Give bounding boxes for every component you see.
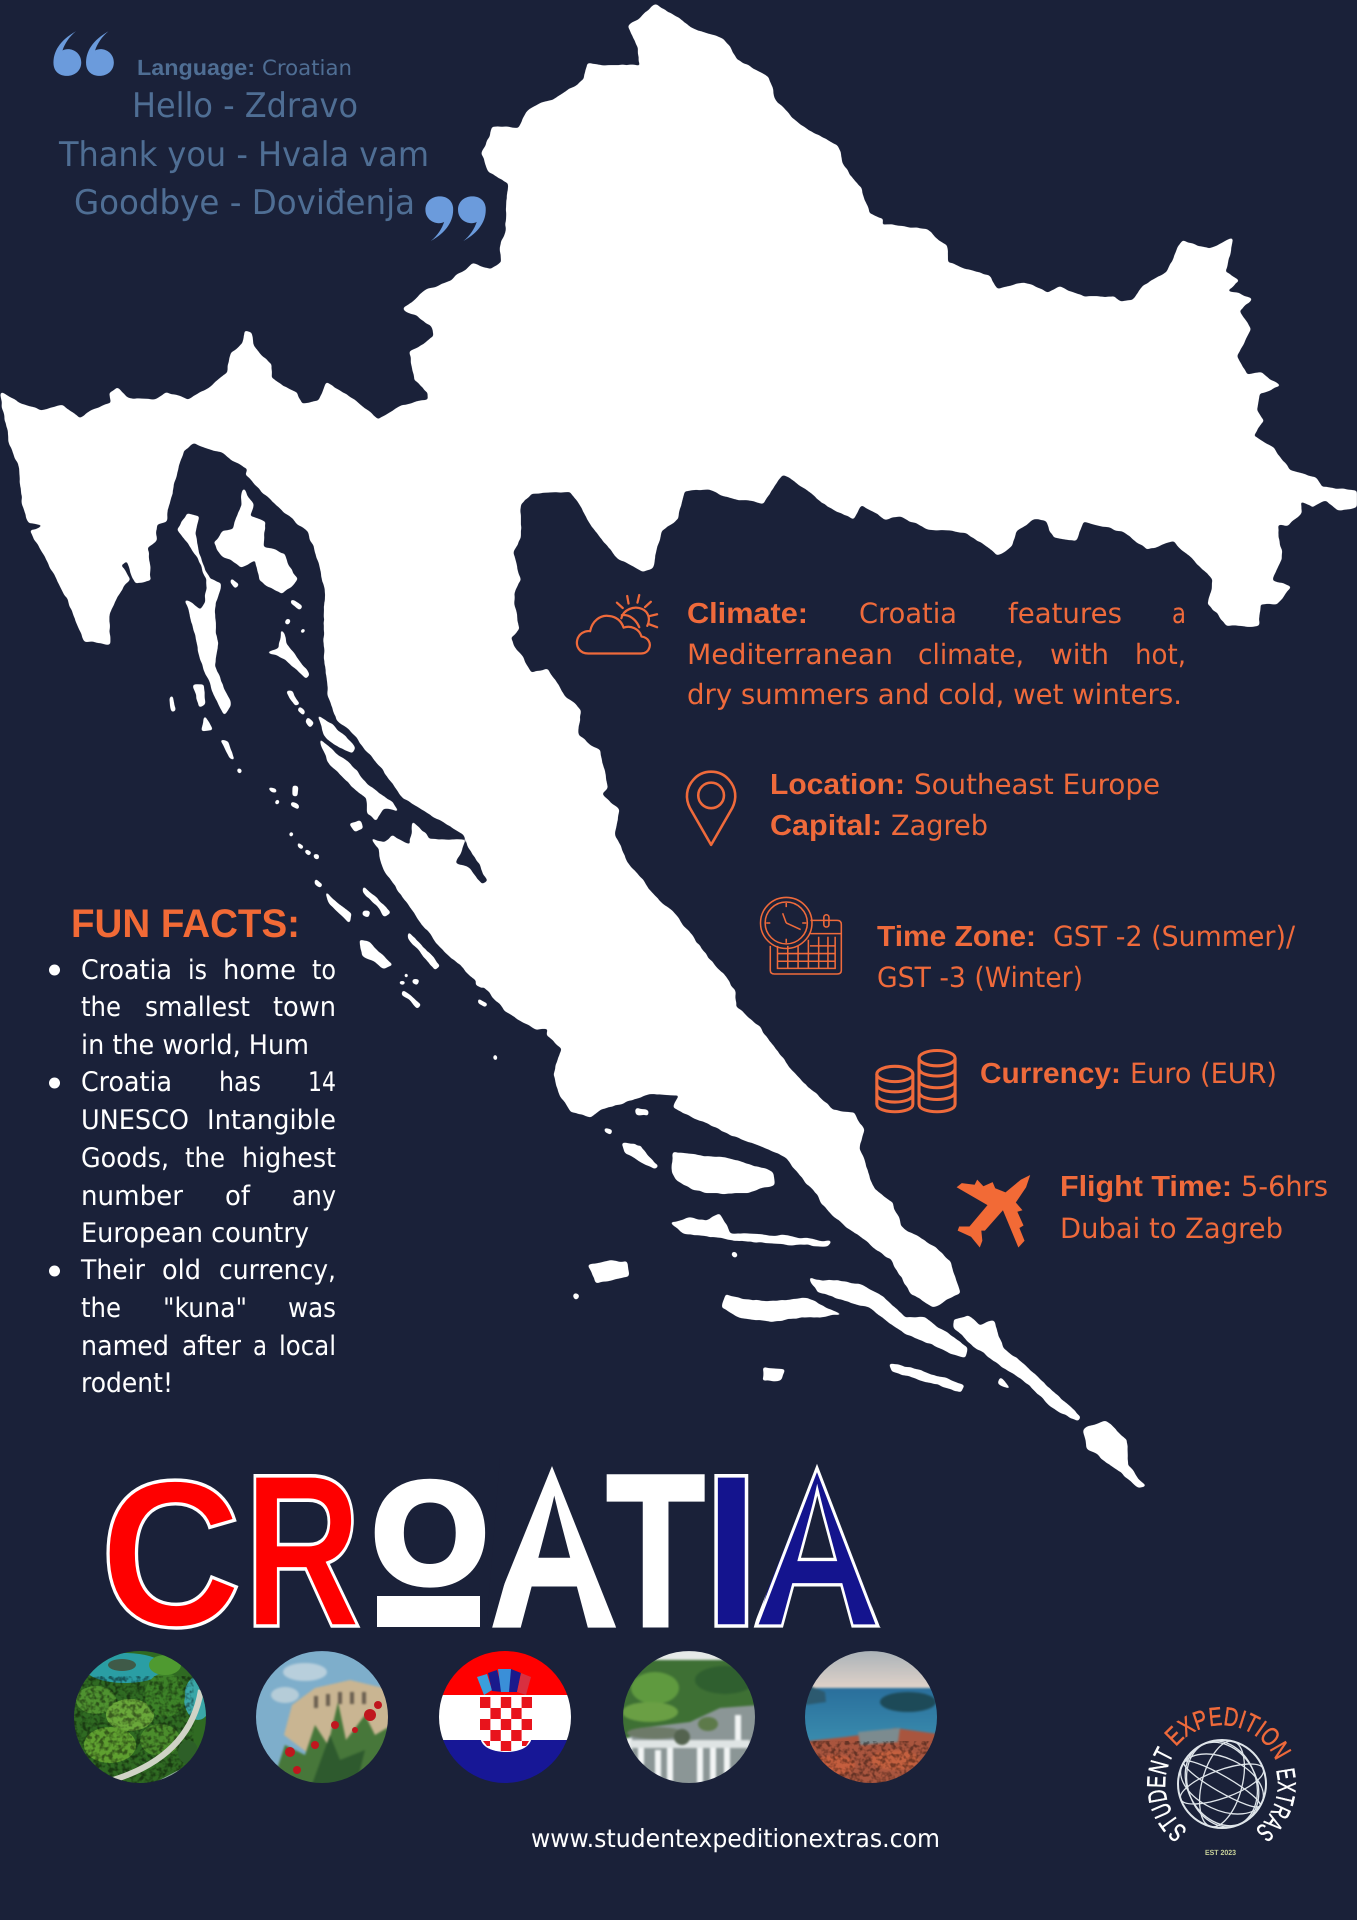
fun facts list: UNESCO — [81, 1105, 189, 1136]
fun facts list: old — [162, 1255, 201, 1286]
title: CROATIA: A — [490, 1414, 619, 1676]
fun facts list: smallest — [145, 992, 250, 1023]
currency text: Euro (EUR) — [1130, 1057, 1277, 1090]
icon: map pin — [687, 772, 735, 845]
fun facts list: a — [253, 1331, 267, 1362]
fun facts list: in the world, Hum — [81, 1030, 309, 1061]
flight text: Flight Time: — [1060, 1171, 1232, 1203]
fun facts heading: FUN FACTS: — [71, 902, 300, 946]
currency block — [877, 1051, 1277, 1112]
fun facts list: is — [188, 955, 207, 986]
climate text: Croatia — [859, 597, 957, 630]
climate text: dry summers and cold, wet winters. — [687, 678, 1182, 711]
fun facts list: home — [223, 955, 296, 986]
photo: Pula arena — [256, 1651, 388, 1783]
climate text: Mediterranean — [687, 638, 893, 671]
fun facts list: named — [81, 1331, 169, 1362]
fun facts list: rodent! — [81, 1368, 173, 1399]
icon: cloud and sun — [577, 595, 657, 654]
logo: globe — [1171, 1729, 1273, 1839]
fun facts list: local — [279, 1331, 336, 1362]
title: CROATIA: C — [100, 1437, 242, 1671]
photo: Plitvice lakes — [70, 1650, 212, 1785]
icon: closing quote — [425, 196, 486, 241]
fun facts list: 14 — [308, 1067, 336, 1098]
map: northern islands — [178, 489, 309, 714]
time zone text — [877, 920, 1296, 994]
logo: curved name: EXTRAS — [1256, 1768, 1296, 1842]
language text: Thank you - Hvala vam — [58, 135, 429, 175]
time zone text: GST -2 (Summer)/ — [1053, 920, 1296, 953]
website URL: www.studentexpeditionextras.com — [531, 1824, 940, 1853]
icon: airplane — [957, 1175, 1030, 1247]
climate text: with — [1050, 638, 1109, 671]
photo: Dubrovnik — [805, 1651, 937, 1783]
icon: coin stacks — [877, 1051, 955, 1112]
time zone text: GST -3 (Winter) — [877, 961, 1083, 994]
climate block — [577, 595, 1186, 711]
language text — [58, 55, 429, 223]
fun facts list: Croatia — [81, 1067, 172, 1098]
fun facts list: the — [81, 1293, 121, 1324]
location text: Capital: — [770, 810, 882, 842]
fun facts list: Croatia — [81, 955, 172, 986]
fun facts list: the — [81, 992, 121, 1023]
logo: curved name — [1146, 1706, 1296, 1842]
fun facts list: number — [81, 1181, 184, 1212]
location text: Southeast Europe — [914, 768, 1160, 801]
fun facts list: was — [288, 1293, 336, 1324]
currency text: Currency: — [980, 1058, 1121, 1090]
fun facts list: European country — [81, 1218, 309, 1249]
fun facts bullets — [49, 964, 60, 1276]
climate text — [687, 597, 1186, 711]
climate text: a — [1172, 597, 1186, 630]
time zone text: Time Zone: — [877, 921, 1036, 953]
logo: curved name: STUDENT — [1146, 1746, 1186, 1842]
fun facts list: the — [185, 1143, 225, 1174]
location text — [770, 768, 1160, 842]
logo: curved name: EXPEDITION — [1164, 1706, 1292, 1760]
fun facts list: to — [312, 955, 336, 986]
fun facts list: Intangible — [207, 1105, 336, 1136]
language text: Goodbye - Doviđenja — [74, 183, 415, 223]
language text: Language: — [137, 55, 255, 80]
map of Croatia — [1, 5, 1356, 1487]
location text: Location: — [770, 769, 905, 801]
logo: established date: EST 2023 — [1205, 1848, 1236, 1857]
flight text — [1060, 1170, 1328, 1245]
fun facts list: has — [219, 1067, 261, 1098]
flag: crown — [477, 1669, 531, 1695]
flag: shield — [480, 1697, 532, 1752]
title: CROATIA: A — [751, 1414, 884, 1676]
icon: opening quote — [53, 31, 114, 76]
fun facts list: town — [273, 992, 336, 1023]
icon: clock and calendar — [761, 897, 841, 974]
map: mainland — [1, 5, 1356, 1306]
title: CROATIA: O — [372, 1453, 488, 1613]
fun facts list: highest — [242, 1143, 336, 1174]
fun facts list: Goods, — [81, 1143, 169, 1174]
fun facts list: "kuna" — [163, 1293, 247, 1324]
flight text: 5-6hrs — [1241, 1170, 1328, 1203]
fun facts list: any — [292, 1181, 336, 1212]
title: CROATIA: R — [244, 1428, 361, 1673]
title: CROATIA: T — [606, 1428, 705, 1673]
flight block — [957, 1170, 1328, 1247]
title: CROATIA — [100, 1414, 892, 1676]
climate text: Climate: — [687, 598, 808, 630]
language panel — [53, 31, 486, 241]
climate text: hot, — [1135, 638, 1186, 671]
fun facts list: currency, — [219, 1255, 336, 1286]
flight text: Dubai to Zagreb — [1060, 1212, 1283, 1245]
map: central islands — [170, 685, 657, 1299]
fun facts list — [80, 955, 336, 1399]
map: southern islands — [574, 1109, 1144, 1487]
time zone block — [761, 897, 1296, 994]
language text: Croatian — [262, 56, 352, 80]
fun facts list: after — [182, 1331, 242, 1362]
fun facts panel — [49, 902, 336, 1399]
fun facts list: Their — [80, 1255, 146, 1286]
photo: Krka waterfall — [623, 1651, 755, 1783]
title: CROATIA: I — [702, 1428, 761, 1673]
location block — [687, 768, 1160, 845]
location text: Zagreb — [891, 809, 988, 842]
climate text: features — [1008, 597, 1122, 630]
language text: Hello - Zdravo — [132, 86, 358, 126]
fun facts list: of — [225, 1181, 251, 1212]
icon: Croatian flag — [435, 1650, 575, 1785]
climate text: climate, — [918, 638, 1024, 671]
logo: Student Expedition Extras — [1146, 1706, 1296, 1857]
currency text — [980, 1057, 1277, 1090]
